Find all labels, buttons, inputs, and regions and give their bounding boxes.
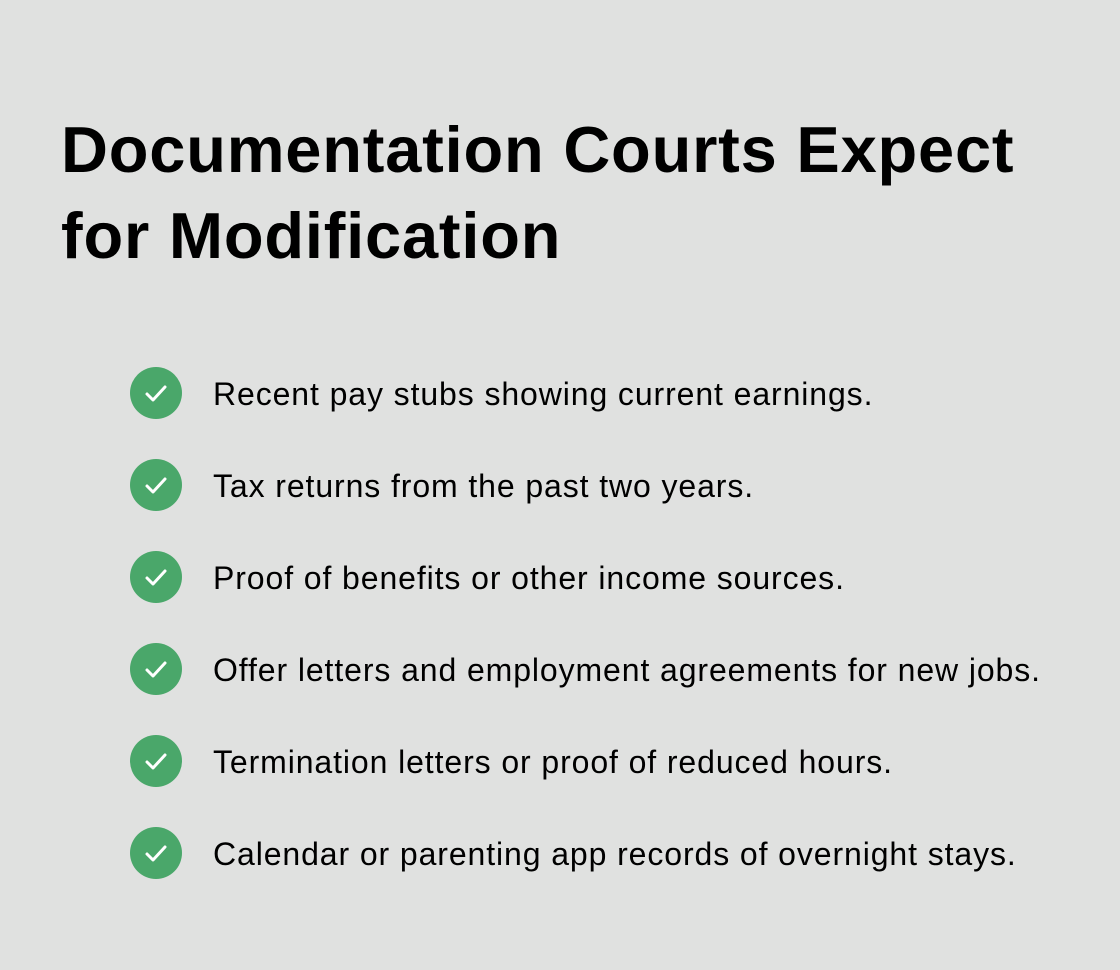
item 6: Calendar or parenting app records of overnight stays. [213,836,1017,872]
item 3 [130,551,845,603]
checklist [130,367,1041,879]
item 5 [130,735,893,787]
item 4: Offer letters and employment agreements for new jobs. [213,652,1041,688]
item 2: Tax returns from the past two years. [213,468,754,504]
item 6 [130,827,1017,879]
item 1: Recent pay stubs showing current earnings. [213,376,873,412]
item 5: Termination letters or proof of reduced hours. [213,744,893,780]
item 3: Proof of benefits or other income sources. [213,560,845,596]
title: Documentation Courts Expect [61,113,1014,186]
title: for Modification [61,199,561,272]
item 1 [130,367,873,419]
item 4 [130,643,1041,695]
title [61,113,1014,272]
item 2 [130,459,754,511]
